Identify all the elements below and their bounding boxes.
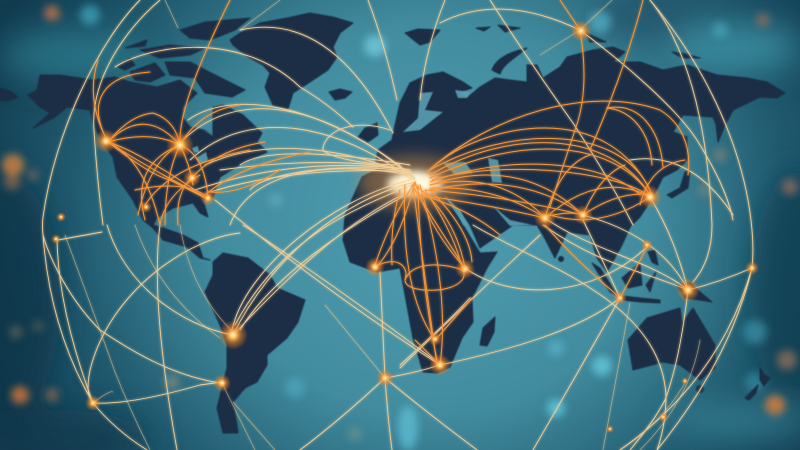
North America network [93,60,310,225]
land: Iceland [329,89,352,100]
node: New Guinea [676,278,700,302]
light inland seas [190,90,533,226]
thin secondary route lines [65,0,700,450]
node: Southern Ocean [658,412,668,422]
node: Johannesburg [428,332,442,346]
Europe to Americas routes [183,104,418,335]
node: Jakarta [613,291,627,305]
land: Greenland [230,13,353,109]
node: Pacific south [56,212,66,222]
land: Novaya Zemlya [492,48,527,74]
land: Japan [667,170,690,198]
node: south Pacific [85,395,101,411]
node: Seattle [94,129,118,153]
land: Alaska fragment [0,88,18,101]
node: Lagos [365,257,385,277]
node: Arctic [570,20,592,42]
land: Java and Sunda islands [623,296,660,303]
land: New Guinea [677,283,712,302]
land: Borneo [622,263,642,288]
land: Sumatra [592,263,617,295]
node: Mumbai [573,205,593,225]
node: Texas [140,201,152,213]
node: Atlanta [183,169,201,187]
land: Sri Lanka [558,256,564,262]
land: Madagascar [480,317,495,346]
land: New Zealand [745,368,770,400]
land: Africa [343,165,497,373]
Asia network [420,101,689,298]
land: Australia [628,308,715,380]
land: Kamchatka [716,110,733,142]
node: Manila [641,239,653,251]
node: Sydney [681,377,689,385]
node: Nairobi [455,259,475,279]
node: Antarctic approach [606,425,614,433]
land: North America [28,75,267,260]
node: Hong Kong [638,185,662,209]
glow around Europe hub [359,155,471,211]
node: Delhi [534,207,556,229]
node: Atlantic [376,369,394,387]
node: Fiji [745,261,759,275]
land: South America [205,253,305,433]
land: Svalbard [405,25,520,45]
node: Chicago [166,131,194,159]
node: Cape Town [429,354,451,376]
land: Siberian islands [586,33,700,58]
node: Lima [218,320,248,350]
land: Tasmania [696,386,704,392]
node: Pacific west [51,234,61,244]
land: Arctic islands [118,18,250,97]
node: Miami [200,190,216,206]
land: British Isles [358,123,378,142]
land: Sulawesi and Philippines [646,250,658,292]
land: Eurasia [375,47,785,272]
node: Santiago [213,374,231,392]
Africa network [375,182,472,365]
